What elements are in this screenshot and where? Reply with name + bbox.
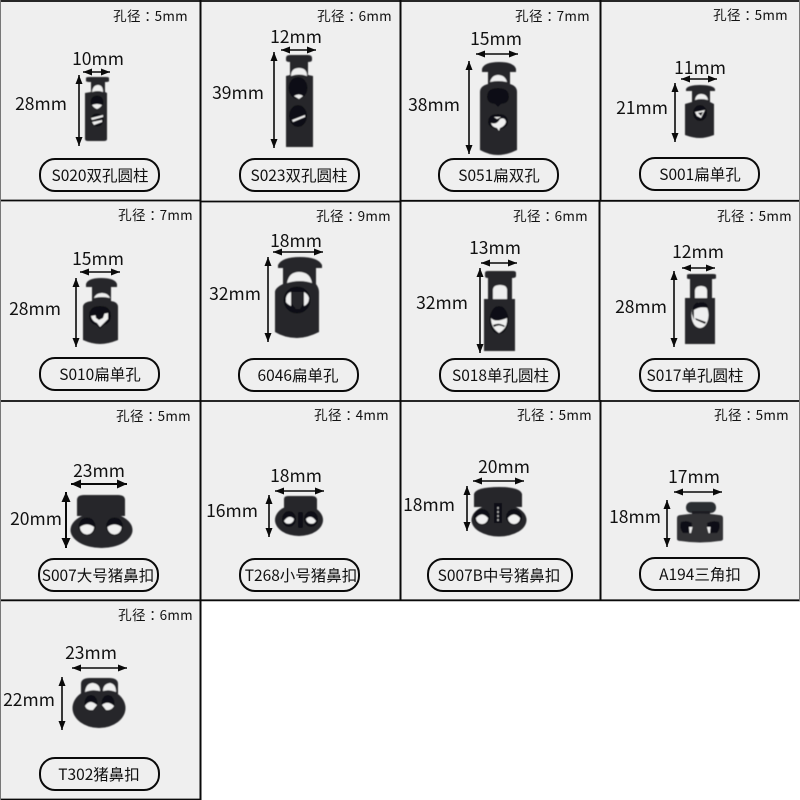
height label: 38mm (408, 92, 460, 117)
panel: S007 (10, 405, 191, 591)
width label: 18mm (270, 228, 322, 253)
panel: 6046 (209, 205, 391, 391)
name pill (640, 558, 759, 590)
arrow: height (674, 83, 676, 142)
width label: 18mm (270, 463, 322, 488)
arrow: width (80, 271, 120, 273)
arrow: width (71, 483, 127, 485)
name pill (240, 559, 359, 591)
width label: 12mm (270, 24, 322, 49)
arrow: height (479, 268, 481, 353)
height label: 20mm (10, 506, 62, 531)
name pill (428, 559, 572, 591)
panel: S017 (615, 205, 792, 391)
aperture label: 孔径 ：7mm (118, 204, 193, 224)
arrow: height (468, 61, 470, 154)
aperture label: 孔径 ：9mm (316, 205, 391, 225)
name pill: S007大号猪鼻扣 (42, 564, 154, 586)
arrow: width (674, 491, 722, 493)
height label: 28mm (9, 296, 61, 321)
aperture label: 孔径 ：6mm (317, 5, 392, 25)
icon: S017 toggle (685, 274, 716, 344)
name pill: S023双孔圆柱 (250, 164, 348, 186)
width label: 15mm (470, 26, 522, 51)
icon: 6046 toggle (275, 257, 322, 338)
aperture label: 孔径 ：7mm (515, 5, 590, 25)
aperture label: 孔径 ：5mm (113, 5, 188, 25)
name pill (40, 358, 159, 390)
height label: 32mm (416, 290, 468, 315)
aperture label: 孔径 ：5mm (717, 205, 792, 225)
name pill: S001扁单孔 (659, 163, 741, 185)
height label: 18mm (609, 504, 661, 529)
arrow: height (61, 677, 63, 730)
icon: S023 toggle (286, 55, 313, 147)
name pill: S020双孔圆柱 (51, 164, 149, 186)
name pill (640, 359, 759, 391)
arrow: height (267, 257, 269, 342)
name pill (40, 758, 159, 790)
panel: T268 (206, 404, 389, 591)
arrow: width (72, 667, 127, 669)
arrow: height (666, 500, 668, 547)
name pill: 6046扁单孔 (258, 364, 339, 386)
name pill (239, 359, 358, 391)
width label: 12mm (672, 239, 724, 264)
icon: S051 toggle (480, 62, 517, 155)
icon: S020 toggle (85, 77, 109, 141)
panel: S051 (408, 5, 590, 191)
name pill: T302猪鼻扣 (58, 763, 140, 785)
name pill (39, 559, 158, 591)
arrow: height (65, 492, 67, 548)
height label: 28mm (615, 294, 667, 319)
name pill (40, 159, 159, 191)
name pill: S010扁单孔 (59, 363, 141, 385)
name pill (440, 359, 559, 391)
arrow: width (273, 251, 323, 253)
aperture label: 孔径 ：4mm (314, 404, 389, 424)
height label: 16mm (206, 498, 258, 523)
panel: S001 (616, 4, 788, 190)
icon: S007B toggle (472, 487, 526, 536)
icon: S001 toggle (685, 85, 715, 138)
arrow: width (275, 490, 324, 492)
width label: 17mm (668, 464, 720, 489)
arrow: height (466, 486, 468, 531)
arrow: height (268, 495, 270, 537)
arrow: width (476, 53, 518, 55)
aperture label: 孔径 ：6mm (513, 205, 588, 225)
panel: S020 (15, 5, 188, 191)
name pill (640, 158, 759, 190)
arrow: height (78, 75, 80, 146)
height label: 32mm (209, 281, 261, 306)
arrow: width (83, 71, 110, 73)
height label: 22mm (3, 687, 55, 712)
icon: S010 toggle (83, 278, 118, 344)
width label: 23mm (65, 640, 117, 665)
aperture label: 孔径 ：5mm (714, 404, 789, 424)
name pill: S007B中号猪鼻扣 (438, 564, 560, 586)
name pill (240, 159, 359, 191)
name pill: S051扁双孔 (458, 164, 540, 186)
arrow: width (281, 49, 316, 51)
width label: 15mm (72, 246, 124, 271)
panel: A194 (609, 404, 789, 590)
panel: T302 (3, 604, 193, 790)
name pill: S017单孔圆柱 (646, 364, 744, 386)
arrow: height (673, 271, 675, 347)
name pill (439, 159, 558, 191)
name pill: A194三角扣 (659, 563, 741, 585)
height label: 39mm (212, 80, 264, 105)
aperture label: 孔径 ：5mm (713, 4, 788, 24)
arrow: width (682, 267, 715, 269)
panel: S007B (403, 404, 592, 591)
panel: S010 (9, 204, 193, 390)
width label: 10mm (72, 46, 124, 71)
aperture label: 孔径 ：6mm (118, 604, 193, 624)
arrow: width (681, 78, 717, 80)
height label: 21mm (616, 95, 668, 120)
aperture label: 孔径 ：5mm (517, 404, 592, 424)
panel: S023 (212, 5, 392, 191)
width label: 13mm (469, 235, 521, 260)
icon: T268 toggle (275, 496, 323, 536)
arrow: height (75, 278, 77, 347)
width label: 23mm (73, 458, 125, 483)
icon: T302 toggle (72, 678, 126, 728)
width label: 20mm (478, 454, 530, 479)
icon: S007 toggle (70, 495, 132, 548)
height label: 18mm (403, 492, 455, 517)
name pill: T268小号猪鼻扣 (245, 564, 357, 586)
icon: S018 toggle (484, 271, 516, 351)
width label: 11mm (674, 55, 726, 80)
icon: A194 toggle (677, 502, 723, 542)
arrow: width (473, 480, 524, 482)
aperture label: 孔径 ：5mm (116, 405, 191, 425)
panel: S018 (416, 205, 588, 391)
name pill: S018单孔圆柱 (452, 364, 549, 386)
arrow: width (481, 262, 517, 264)
height label: 28mm (15, 91, 67, 116)
arrow: height (273, 52, 275, 148)
